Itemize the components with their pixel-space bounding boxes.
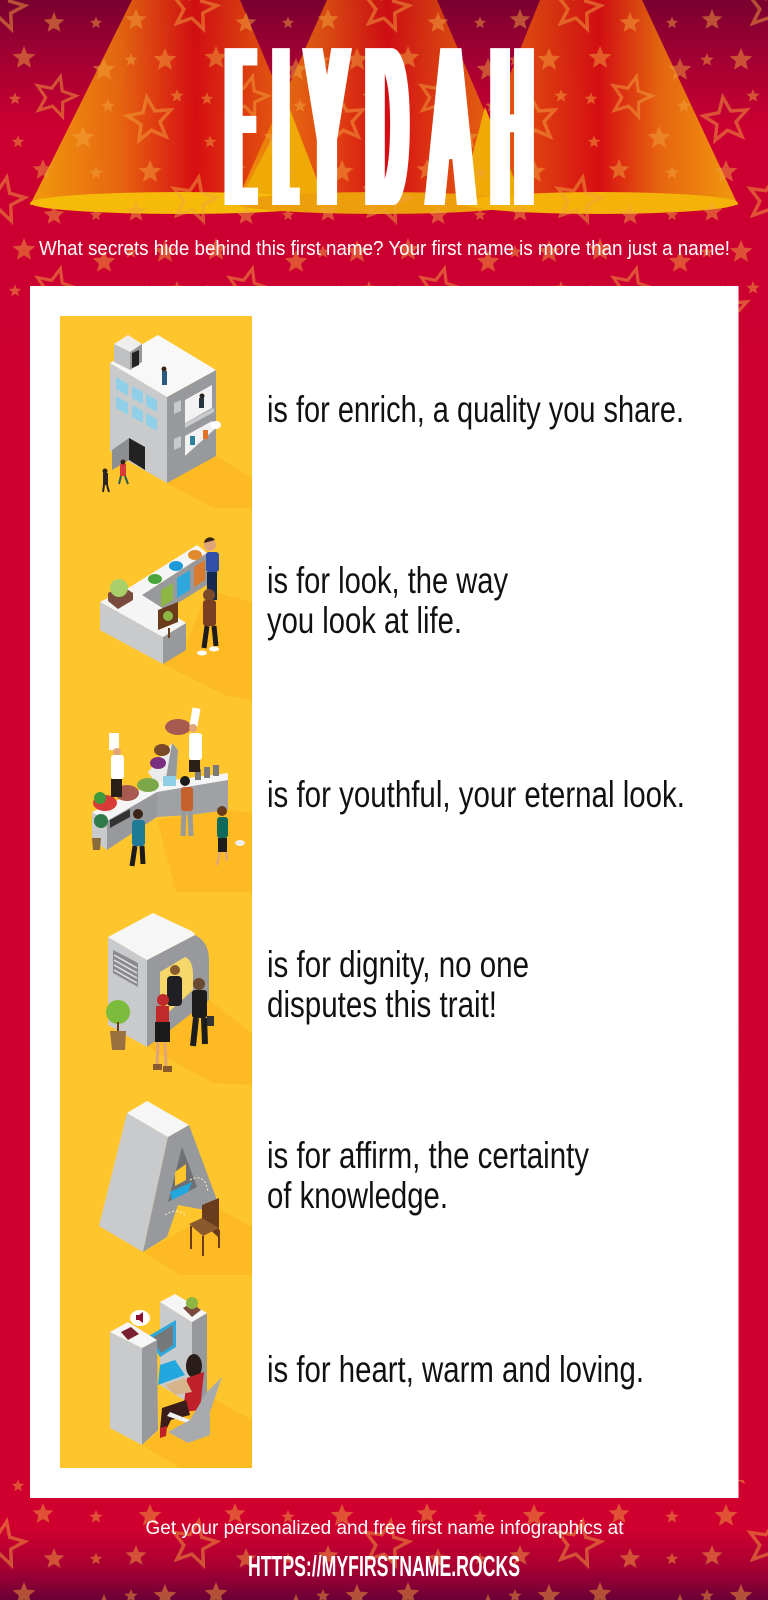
- illustration: buffet: [92, 707, 252, 892]
- text block: D: [267, 944, 529, 1025]
- illustration: letter D doorway: [106, 913, 252, 1085]
- title: D: [368, 0, 405, 253]
- panel: white card: [30, 286, 738, 1498]
- illustration: building: [102, 335, 252, 508]
- footer call to action: Get your personalized and free first name infographics at: [146, 1518, 624, 1539]
- title: A: [432, 0, 470, 254]
- text block: L: you look at life.: [267, 600, 462, 641]
- title: [229, 0, 531, 255]
- title: L: [277, 0, 293, 254]
- spotlight overlaps: [238, 107, 524, 203]
- title: E: [229, 0, 252, 254]
- illustration column: [60, 316, 252, 1468]
- spotlight: right: [458, 0, 738, 205]
- star pattern: bottom: [0, 1480, 768, 1600]
- illustration: letter A desk: [99, 1101, 252, 1275]
- text block: D: disputes this trait!: [267, 984, 497, 1025]
- star pattern: top: [0, 0, 768, 312]
- subtitle: What secrets hide behind this first name? Your first name is more than just a name!: [39, 238, 730, 260]
- text block: A: [267, 1135, 589, 1216]
- spotlights: [30, 0, 738, 214]
- spotlight: centre: [236, 0, 524, 203]
- spotlight: left: [30, 0, 326, 205]
- text block: A: is for affirm, the certainty: [267, 1135, 589, 1176]
- text block: H: is for heart, warm and loving.: [267, 1349, 644, 1390]
- text block: A: of knowledge.: [267, 1175, 448, 1216]
- text block: D: is for dignity, no one: [267, 944, 529, 985]
- footer url: HTTPS://MYFIRSTNAME.ROCKS: [248, 1551, 520, 1583]
- spotlight pools: [30, 192, 738, 214]
- illustration: letter H workstation: [110, 1294, 252, 1468]
- title: Y: [308, 0, 346, 254]
- text block: L: [267, 560, 508, 641]
- text block: L: is for look, the way: [267, 560, 508, 601]
- illustration: recycling counter: [100, 537, 252, 700]
- title: H: [494, 0, 531, 255]
